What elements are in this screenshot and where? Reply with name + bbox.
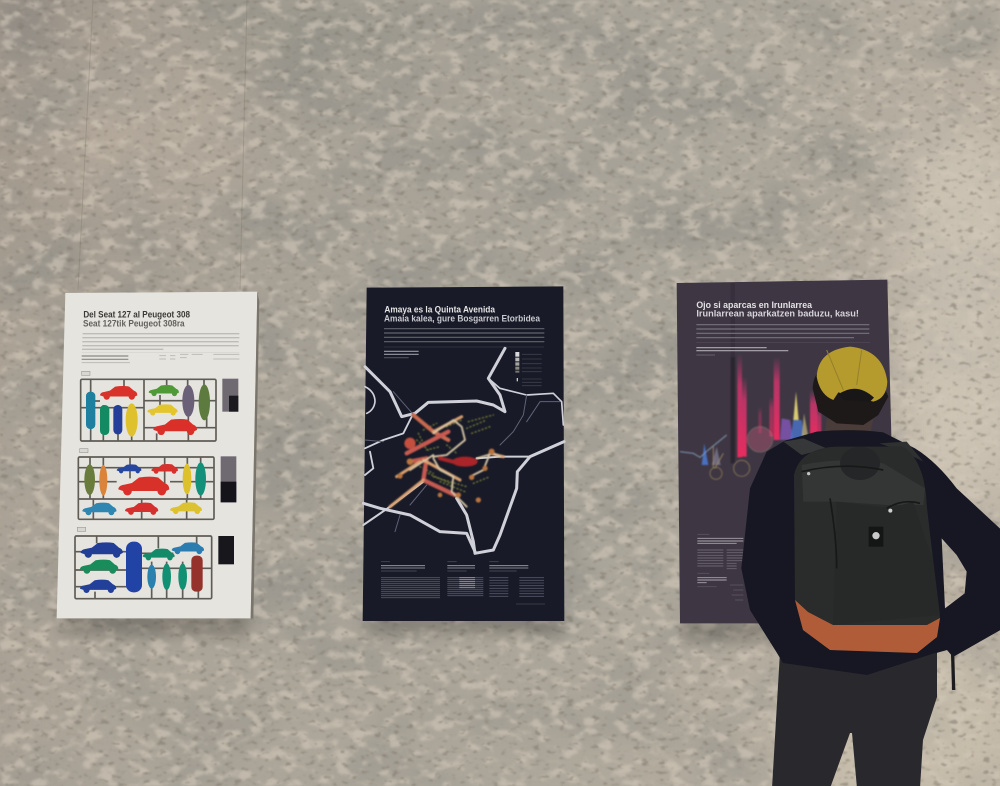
yellow cap xyxy=(817,347,887,402)
chart: parking spike skyline xyxy=(680,353,821,479)
intro text block xyxy=(82,334,239,363)
table block: left xyxy=(381,562,440,598)
sprue 3: blue, green and dark red cars xyxy=(75,527,212,599)
poster: Del Seat 127 al Peugeot 308 xyxy=(57,292,259,618)
map of Pamplona: road network xyxy=(363,348,564,553)
backpack orange base panel xyxy=(795,600,940,653)
poster shadows on wall xyxy=(60,612,790,644)
poster title: Amaya es la Quinta Avenida xyxy=(384,305,496,315)
table block: bottom left text xyxy=(697,534,743,600)
dark sweater with hand on hip xyxy=(741,430,1000,675)
person seen from behind xyxy=(741,347,1000,786)
poster title: Seat 127tik Peugeot 308ra xyxy=(83,319,186,329)
map legend xyxy=(515,352,542,386)
car photo thumbnail 1 xyxy=(222,379,238,412)
neck xyxy=(825,418,873,435)
backpack xyxy=(783,438,940,653)
backpack logo tag xyxy=(869,527,883,547)
poster title xyxy=(384,305,541,323)
table block: centre xyxy=(447,562,483,596)
poster title xyxy=(83,310,190,329)
poster title: Irunlarrean aparkatzen baduzu, kasu! xyxy=(696,309,859,319)
poster title xyxy=(696,300,859,319)
table block: right xyxy=(489,562,545,604)
intro text block xyxy=(384,329,544,358)
car photo thumbnail 2 xyxy=(221,456,236,502)
poster title: Del Seat 127 al Peugeot 308 xyxy=(83,310,190,320)
poster title: Ojo si aparcas en Irunlarrea xyxy=(696,300,813,310)
trousers xyxy=(772,652,937,786)
hair xyxy=(813,372,888,425)
map of Pamplona: parking heat lines xyxy=(390,415,503,507)
poster: Ojo si aparcas en Irunlarrea xyxy=(677,280,891,623)
hanging strap xyxy=(953,655,954,690)
sprue 2: orange, green and red cars xyxy=(78,449,214,519)
sprue 1: red, green, blue and yellow cars xyxy=(81,371,216,441)
intro text block xyxy=(696,325,870,355)
car photo thumbnail 3 xyxy=(218,536,234,564)
poster title: Amaia kalea, gure Bosgarren Etorbidea xyxy=(384,313,541,323)
poster: Amaya es la Quinta Avenida xyxy=(363,286,564,621)
